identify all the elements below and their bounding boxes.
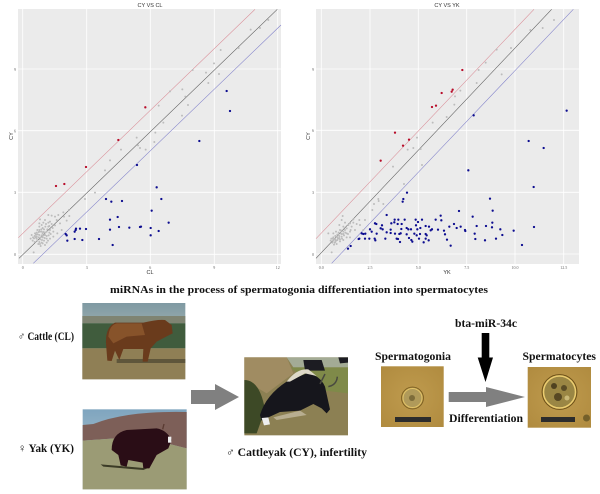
label: spermatocytes: Spermatocytes (522, 351, 597, 363)
axis tick labels: 6 (312, 128, 314, 133)
label: spermatogonia: Spermatogonia (375, 351, 451, 363)
arrow: differentiation (449, 387, 525, 407)
label: differentiation: Differentiation (449, 413, 524, 425)
blue down-regulated points (66, 91, 230, 245)
axis tick labels (312, 67, 567, 270)
axis tick labels: 10.0 (512, 265, 518, 270)
photo: yak (83, 409, 187, 489)
photo: cattleyak (244, 357, 348, 435)
grey non-significant points (31, 20, 268, 252)
diagonal threshold lines (316, 9, 573, 263)
x axis label: YK: YK (443, 270, 451, 276)
red up-regulated points (56, 107, 145, 186)
grey non-significant points (328, 20, 554, 252)
micrograph: spermatocytes (528, 367, 591, 428)
photo: cattle (82, 303, 185, 379)
blue down-regulated points (348, 111, 567, 249)
plot panel background (18, 9, 281, 264)
arrow: inhibition by miRNA (478, 333, 493, 382)
label: cattle: ♂ Cattle (CL) (18, 331, 74, 343)
axis tick labels: 7.5 (464, 265, 469, 270)
label: yak: ♀ Yak (YK) (18, 443, 74, 455)
label: cattleyak: ♂ Cattleyak (CY), infertility (226, 447, 367, 459)
plot title: CY VS YK: CY VS YK (434, 3, 460, 9)
axis tick labels: 12 (276, 265, 280, 270)
axis tick labels: 6 (149, 265, 151, 270)
label: bta-miR-34c: bta-miR-34c (455, 318, 517, 330)
y axis label: CY: CY (306, 132, 312, 140)
axis tick labels (14, 67, 280, 270)
axis tick labels: 5.0 (416, 265, 421, 270)
axis tick labels: 9 (14, 67, 16, 72)
diagonal threshold lines (18, 9, 281, 263)
axis tick labels: 9 (312, 67, 314, 72)
axis tick labels: 9 (213, 265, 215, 270)
heading: miRNAs in the process of spermatogonia differentiation into spermatocytes (110, 285, 488, 296)
red up-regulated points (381, 70, 462, 161)
axis tick labels: 3 (14, 190, 16, 195)
axis tick labels: 3 (312, 190, 314, 195)
scatter plot: CY vs YK (306, 3, 579, 276)
axis tick labels: 3 (86, 265, 88, 270)
axis tick labels: 0 (14, 252, 16, 257)
x axis label: CL: CL (146, 270, 154, 276)
axis tick labels: 6 (14, 128, 16, 134)
axis tick labels: 2.5 (368, 265, 372, 270)
plot title: CY VS CL: CY VS CL (138, 3, 162, 9)
axis tick labels: 0 (22, 265, 24, 270)
arrow: cross to cattleyak (191, 384, 239, 410)
scatter plot: CY vs CL (9, 3, 281, 276)
plot panel background (316, 9, 579, 264)
y axis label: CY: CY (9, 132, 15, 140)
axis tick labels: 0.0 (319, 265, 324, 270)
axis tick labels: 12.5 (560, 265, 567, 270)
micrograph: spermatogonia (381, 366, 444, 427)
axis tick labels: 0 (312, 252, 314, 257)
